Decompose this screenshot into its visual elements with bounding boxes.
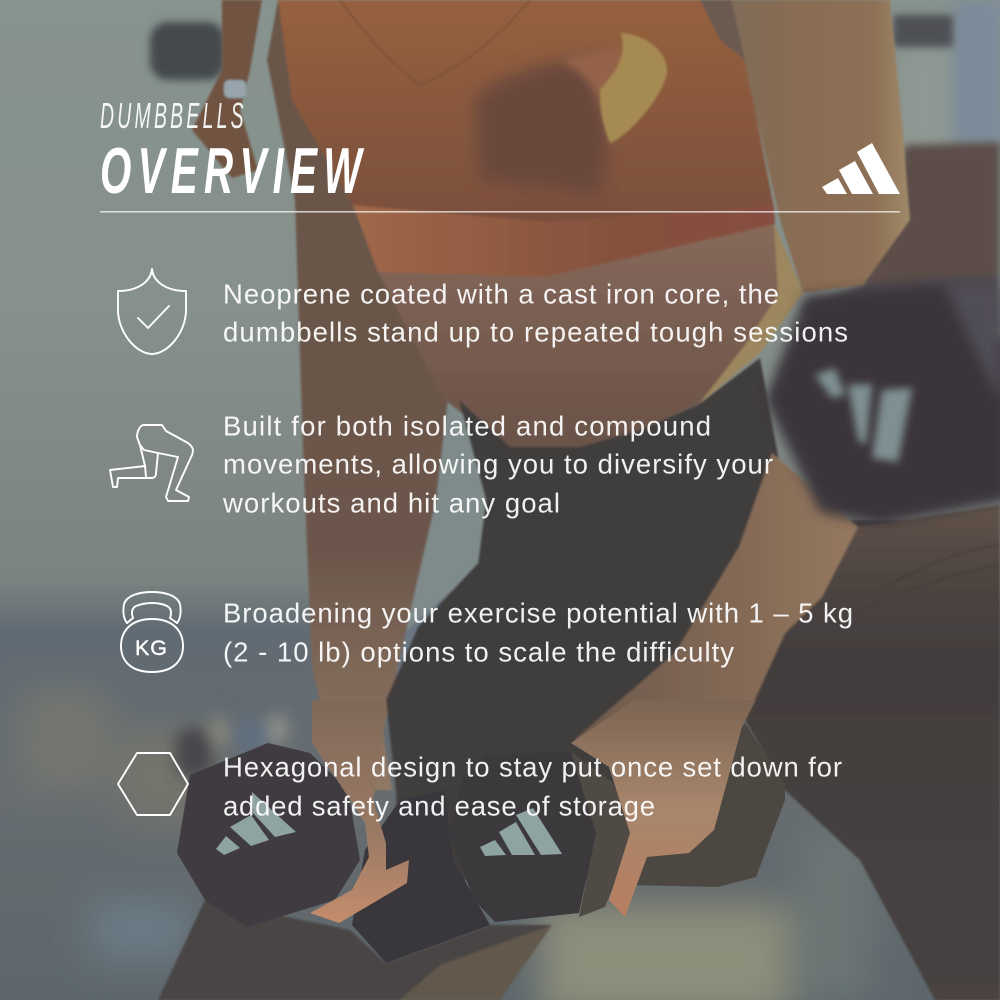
thigh [745,505,1000,1000]
blurred foreground dumbbell [765,283,1000,525]
top [278,0,774,225]
text: hexagonal design: Hexagonal design to stay put once set down for [223,752,842,783]
icon: shield with check [118,269,186,354]
left arm [267,0,448,790]
text: durability: Neoprene coated with a cast iron core, the [223,279,779,310]
text: weight options: (2 - 10 lb) options to scale the difficulty [223,637,734,668]
text: movements: workouts and hit any goal [222,488,560,519]
text: movements: Built for both isolated and compound [223,411,711,442]
text: weight options [223,598,853,668]
text: movements [222,411,773,519]
eyebrow: DUMBBELLS: DUMBBELLS [100,97,247,137]
text: weight options: Broadening your exercise potential with 1 – 5 kg [223,598,853,629]
title: OVERVIEW: OVERVIEW [100,135,368,207]
icon: kettlebell KG: KG [135,636,167,660]
upper right arm [730,0,910,293]
midriff [378,223,803,447]
text: hexagonal design [223,752,842,822]
icon: hexagon [118,753,188,815]
text: durability [223,279,848,348]
dumbbells in hands [177,700,785,963]
text: movements: movements, allowing you to diversify your [223,449,773,480]
bg gap beside waist [395,400,486,650]
right hand [571,700,756,917]
icon: lunge legs [110,425,193,501]
forearm [574,453,858,760]
text: durability: dumbbells stand up to repeated tough sessions [223,317,848,348]
icon: adidas logo [822,143,900,194]
icon: kettlebell KG [121,592,183,672]
lower legging and leg [158,900,552,1000]
braid [192,0,262,178]
text: hexagonal design: added safety and ease of storage [223,791,655,822]
leggings [386,358,1000,1000]
left hand [310,700,409,923]
